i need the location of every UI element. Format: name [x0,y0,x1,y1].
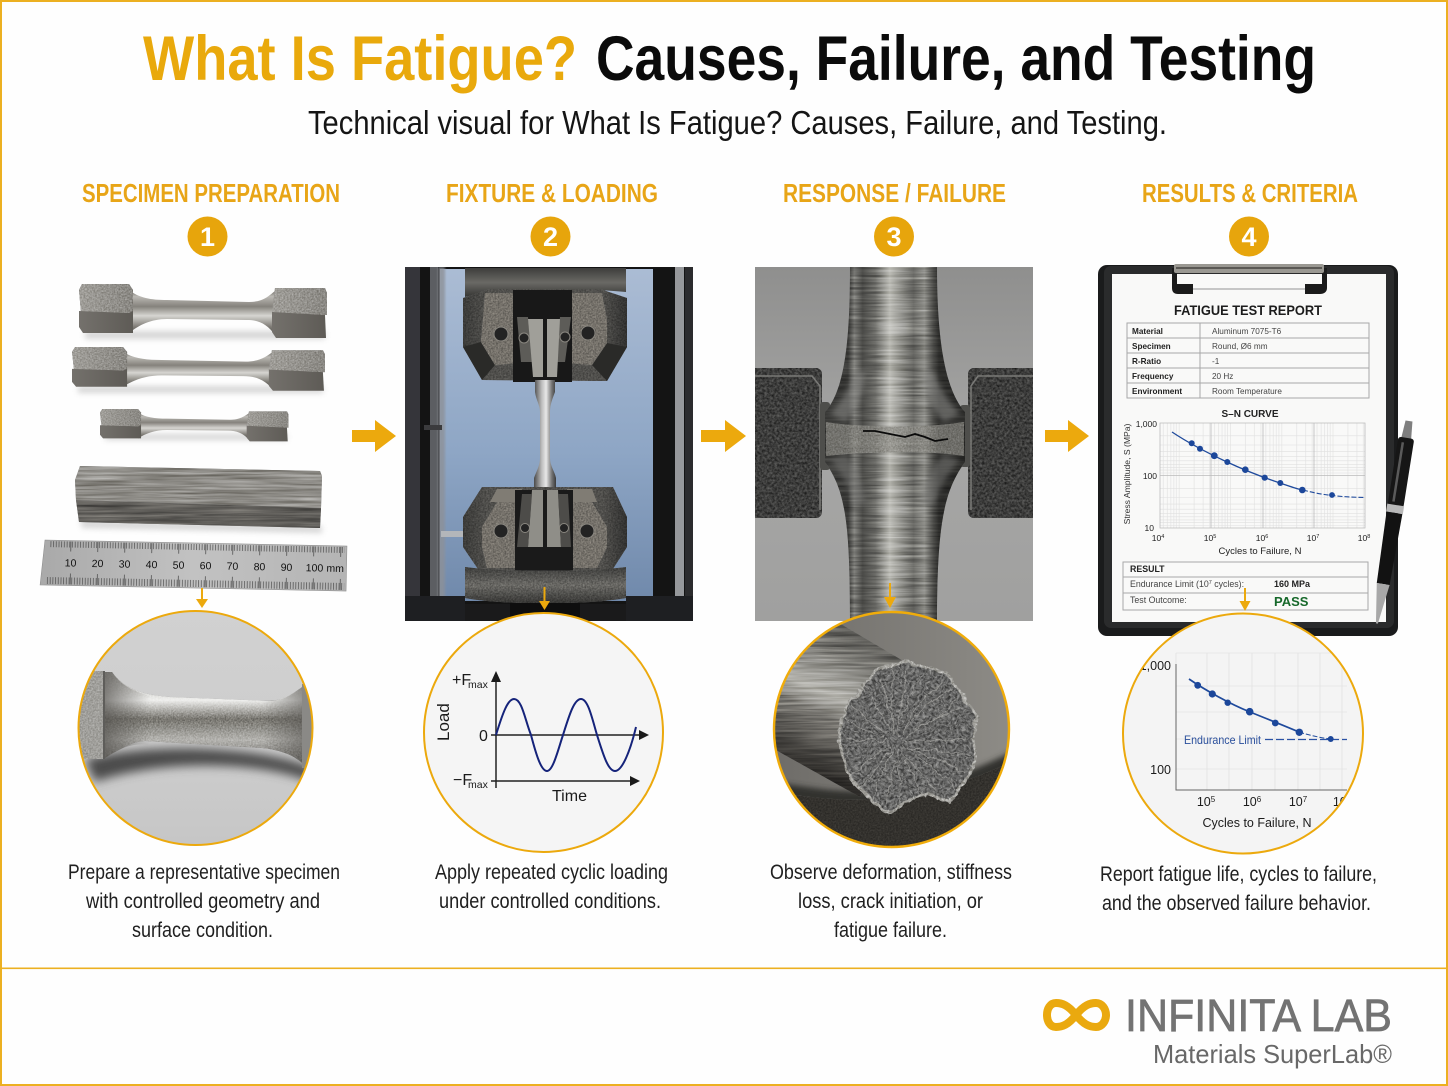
S-N curve chart: 10 [1145,523,1154,533]
number badge 2: 2 [543,222,558,252]
S-N curve chart [1122,409,1370,557]
tagline: Materials SuperLab® [1153,1039,1392,1069]
steel ruler: 80 [254,561,266,573]
detail circle: endurance limit chart: 1,000 [1140,659,1171,673]
heading: response and failure: RESPONSE / FAILURE [783,178,1006,208]
subtitle: Technical visual for What Is Fatigue? Causes, Failure, and Testing. [308,104,1167,141]
specimen data table: Round, Ø6 mm [1212,342,1268,351]
detail circle: endurance limit chart: 100 [1150,763,1171,777]
arrow: step 1 to 2 [352,420,396,452]
S-N curve chart: 8 [1367,534,1370,540]
text: step 3 description: loss, crack initiation, or [798,890,983,913]
heading: results and criteria: RESULTS & CRITERIA [1142,178,1358,208]
result box: Test Outcome: [1130,595,1187,605]
fracture face [838,662,977,813]
axis labels: +F [452,672,471,689]
text: step 1 description: with controlled geometry and [85,890,320,913]
specimen data table: R-Ratio [1132,357,1161,366]
clipboard board [1098,265,1398,636]
text: step 1 description: Prepare a representative specimen [68,861,340,884]
text: step 4 description: Report fatigue life, cycles to failure, [1100,863,1377,886]
number badge 4: 4 [1241,222,1257,252]
text: step 4 description [1100,863,1377,915]
number badge 4 [1229,216,1269,256]
panel: specimens and ruler [40,284,347,591]
result box: PASS [1274,594,1309,609]
result box: 7 [1209,580,1212,586]
number badge 2 [530,216,570,256]
specimen data table: Frequency [1132,372,1174,381]
S-N curve chart: Cycles to Failure, N [1219,546,1302,557]
detail circle: endurance limit chart: 8 [1347,795,1352,804]
steel ruler: 70 [227,561,239,573]
S-N curve chart: S–N CURVE [1221,409,1279,420]
steel ruler [40,540,347,591]
number badge 1 [188,216,228,256]
result box: RESULT [1130,564,1165,574]
zoomed S-N curve [1189,679,1299,732]
S-N curve chart: 7 [1316,534,1319,540]
specimen data table: Specimen [1132,342,1171,351]
specimen rod with crack [825,267,965,621]
dogbone specimen in grips [534,380,556,489]
specimen shadows [78,331,325,533]
text: step 3 description: fatigue failure. [834,919,947,942]
steel ruler: 10 [65,557,77,570]
small dogbone specimen [100,409,288,441]
title [143,24,1316,94]
load axes [491,678,642,788]
S-N curve chart: Stress Amplitude, S (MPa) [1122,423,1132,524]
detail circle: endurance limit chart: 10 [1333,795,1347,809]
number badge 3: 3 [886,222,902,252]
steel ruler: mm [326,563,344,575]
number badge 1: 1 [200,222,215,252]
detail circle: endurance limit chart: 6 [1257,795,1262,804]
heading: specimen preparation: SPECIMEN PREPARATION [82,178,340,208]
panel: testing machine photo [405,267,693,621]
specimen data table: Aluminum 7075-T6 [1212,327,1282,336]
axis labels: 0 [479,728,488,745]
steel ruler: 90 [281,562,293,574]
result box: Endurance Limit (10 [1130,579,1209,589]
detail circle: endurance limit chart [1123,614,1363,854]
medium dogbone specimen [72,347,325,391]
heading: fixture and loading: FIXTURE & LOADING [446,178,658,208]
specimen data table: Material [1132,327,1163,336]
base plate [405,596,693,621]
detail circle: endurance limit chart: 10 [1289,795,1303,809]
small arrow to detail 3 [884,583,896,608]
paper sheet [1112,274,1386,622]
text: step 2 description [435,861,668,913]
number badge 3 [874,216,914,256]
large dogbone specimen [79,284,327,338]
wordmark: INFINITA LAB [1125,990,1392,1041]
small arrow to detail 2 [539,587,550,610]
detail circle: endurance limit chart: 10 [1197,795,1211,809]
S-N curve chart: 5 [1213,534,1216,540]
detail circle: endurance limit chart: 5 [1211,795,1216,804]
result box: 160 MPa [1274,579,1311,589]
icon: pen [1369,420,1417,625]
specimen data table [1127,323,1369,398]
logo: Infinita Lab [1047,990,1392,1069]
steel ruler: 50 [173,560,185,572]
upper crosshead and grip [463,268,627,382]
detail circle: specimen close-up [78,611,314,845]
specimen data table: -1 [1212,357,1220,366]
icon: infinity symbol [1047,1003,1106,1027]
panel: cracked specimen photo [750,267,1038,621]
S-N curve chart: 100 [1143,471,1157,481]
S-N curve chart: 10 [1256,533,1265,543]
detail circle: load waveform [424,613,663,852]
detail circle: endurance limit chart: 7 [1303,795,1308,804]
S-N curve chart: 10 [1307,533,1316,543]
cyclic load sine curve [496,699,636,771]
text: step 3 description: Observe deformation, stiffness [770,861,1012,884]
text: step 4 description: and the observed failure behavior. [1102,892,1371,915]
axis labels: Time [552,788,587,805]
report title: FATIGUE TEST REPORT [1174,302,1322,318]
S-N curve chart: 1,000 [1136,419,1157,429]
title: Causes, Failure, and Testing [596,24,1316,94]
small arrow to detail 1 [196,588,208,608]
specimen data table: Environment [1132,387,1182,396]
text: step 2 description: Apply repeated cyclic loading [435,861,668,884]
gridded plot [1176,653,1347,790]
steel ruler: 20 [92,558,104,570]
detail circle: fracture surface [772,610,1010,848]
steel ruler: 60 [200,560,212,572]
axis labels: Load [434,703,453,741]
axis labels: −F [453,772,472,789]
S-N curve chart: 10 [1358,533,1367,543]
axis labels: max [468,779,489,791]
step headings and numbers [82,178,1358,256]
metal clip [1172,264,1327,294]
S-N curve chart: 4 [1161,534,1164,540]
text: step 2 description: under controlled conditions. [439,890,661,913]
specimen data table: 20 Hz [1212,372,1233,381]
square bar stock [75,466,322,528]
text: step 1 description: surface condition. [132,919,273,942]
axis labels [434,672,587,805]
text: step 3 description [770,861,1012,942]
steel ruler: 100 [306,562,324,575]
detail circle: endurance limit chart: 10 [1243,795,1257,809]
specimen data table: Room Temperature [1212,387,1282,396]
lower crosshead and grip [463,487,627,603]
S-N curve chart: 6 [1265,534,1268,540]
small arrow to detail 4 [1240,588,1250,611]
gripping blocks [750,368,1038,518]
title: What Is Fatigue? [143,24,577,94]
result box [1123,562,1368,610]
steel ruler: 40 [146,559,158,571]
arrow: step 3 to 4 [1045,420,1089,452]
detail circle: endurance limit chart: Endurance Limit [1184,733,1262,747]
detail circle: endurance limit chart: Cycles to Failure, N [1202,816,1312,830]
text: step 1 description [68,861,340,942]
clipboard report [1098,264,1398,636]
machine columns [405,267,693,602]
arrow: step 2 to 3 [701,420,746,452]
S-N curve chart: 10 [1204,533,1213,543]
steel ruler: 30 [119,558,131,571]
axis labels: max [468,679,489,691]
S-N curve chart: 10 [1152,533,1161,543]
result box: cycles): [1212,579,1244,589]
